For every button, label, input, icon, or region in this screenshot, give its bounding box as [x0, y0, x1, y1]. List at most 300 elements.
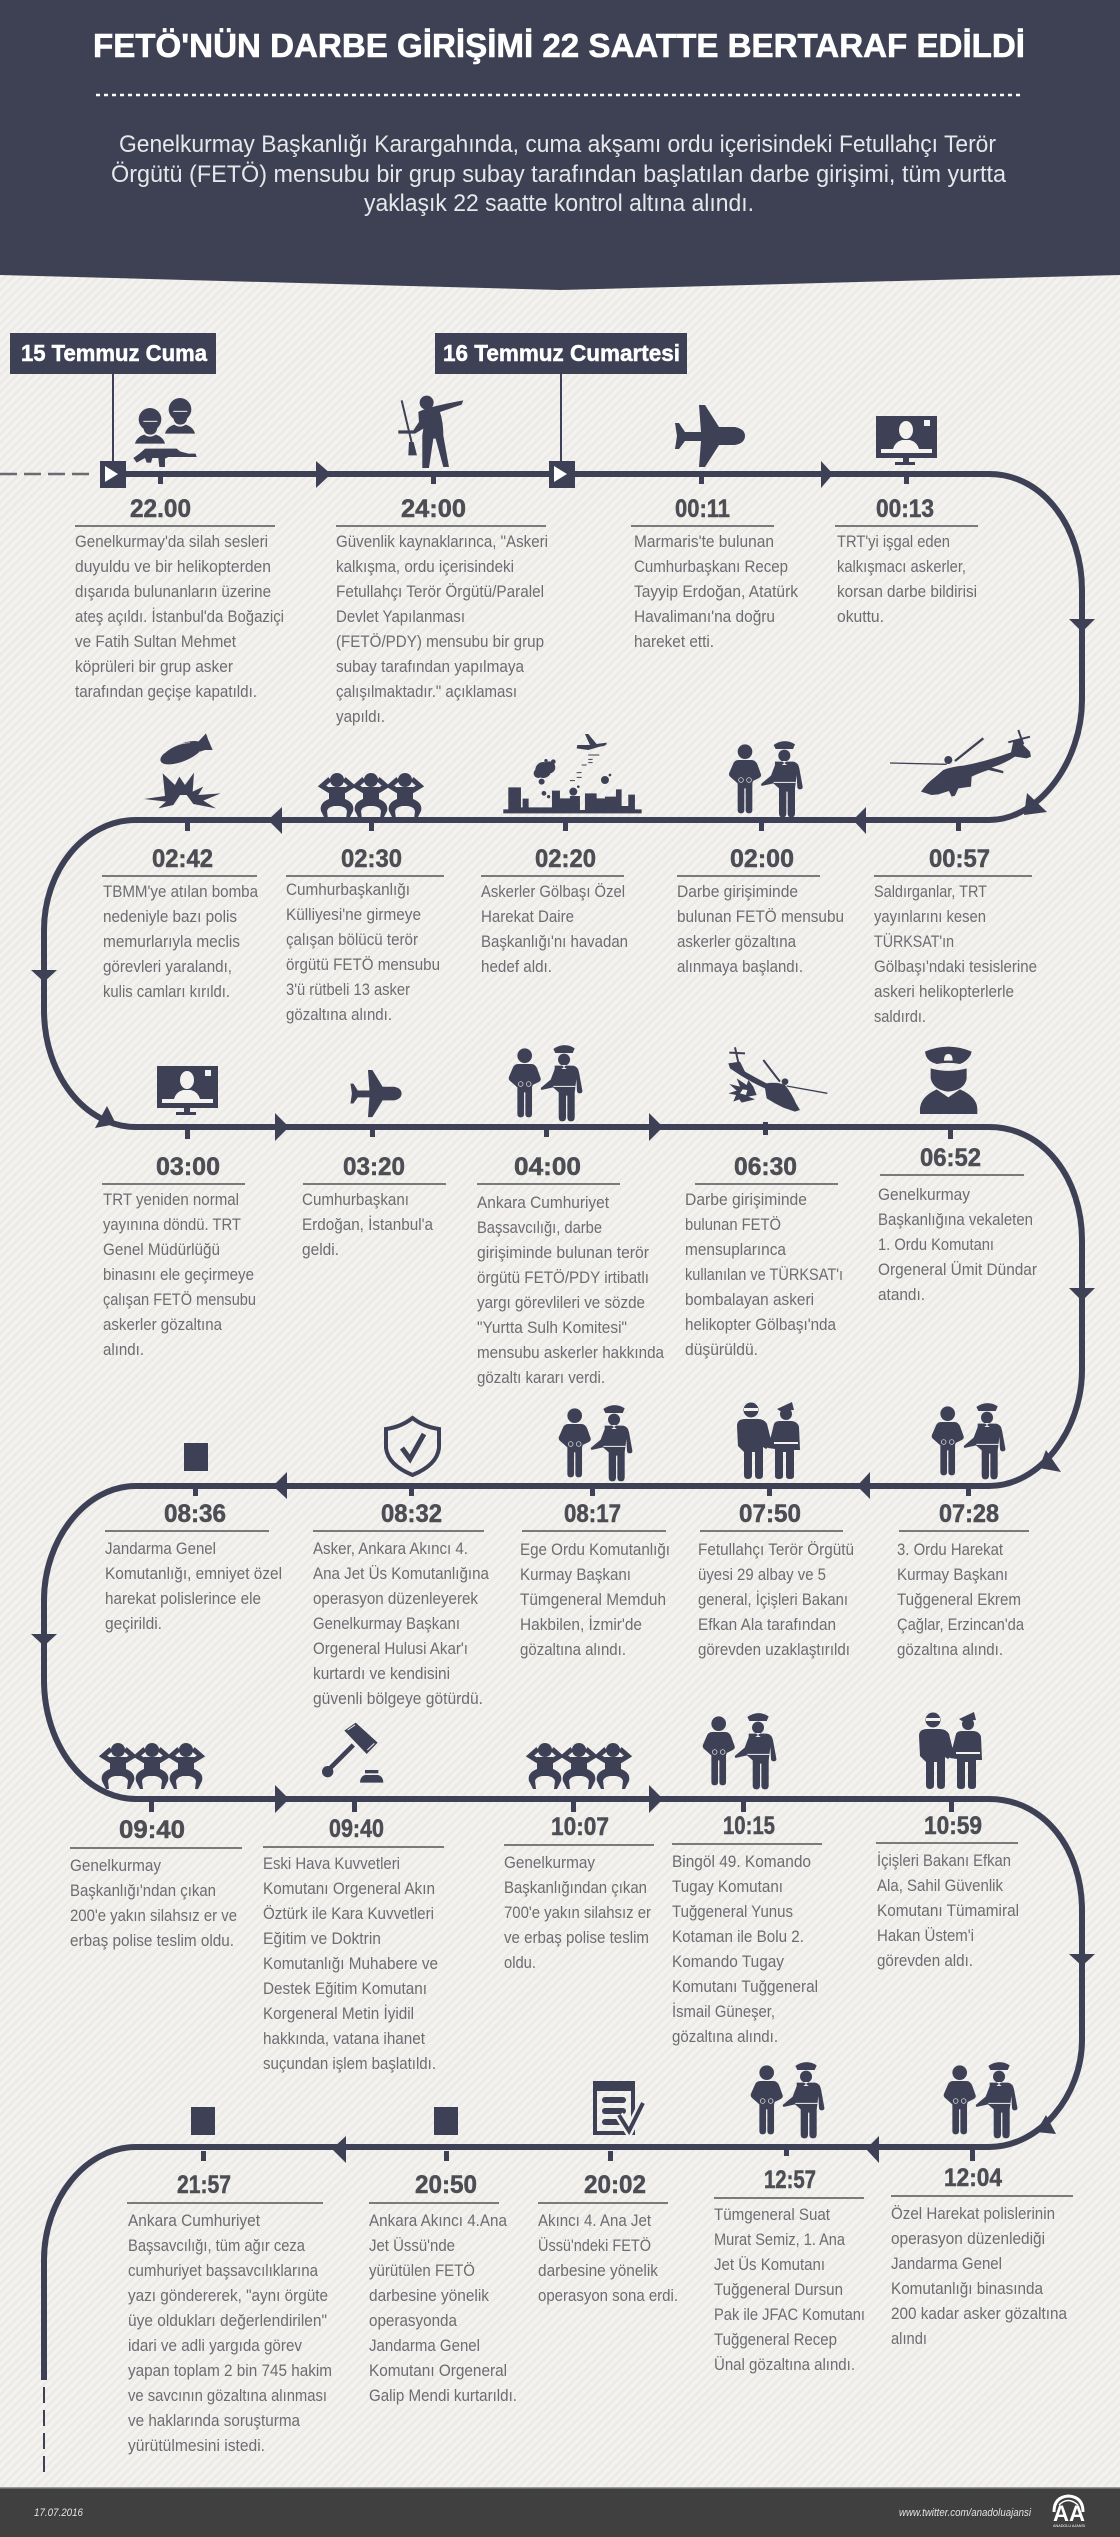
description: Genelkurmay	[70, 1856, 161, 1875]
description: saldırdı.	[874, 1007, 926, 1026]
description	[103, 882, 258, 1001]
description	[477, 1193, 664, 1387]
event: 00:13: 00:13	[876, 495, 934, 523]
description: memurlarıyla meclis	[103, 932, 240, 951]
description: İsmail Güneşer,	[672, 2002, 775, 2021]
description: alındı.	[103, 1340, 144, 1359]
event: 07:50	[698, 1486, 854, 1659]
description: operasyonda	[369, 2311, 457, 2330]
event: 08:36	[105, 1486, 282, 1633]
description: Jet Üssü'nde	[369, 2236, 455, 2255]
description	[714, 2205, 865, 2374]
description: yürütülmesini istedi.	[128, 2436, 265, 2455]
icon: surrendering prisoners	[321, 773, 421, 819]
icon: placeholder square	[184, 1443, 208, 1471]
description: Jandarma Genel	[369, 2336, 480, 2355]
event: 06:52: 06:52	[920, 1144, 981, 1172]
description: yapan toplam 2 bin 745 hakim	[128, 2361, 332, 2380]
description: Murat Semiz, 1. Ana	[714, 2230, 845, 2249]
event: 20:02: 20:02	[584, 2171, 646, 2199]
description	[877, 1851, 1019, 1970]
event: 06:52	[878, 1127, 1037, 1304]
description: Tayyip Erdoğan, Atatürk	[634, 582, 798, 601]
event: 24:00	[336, 474, 548, 726]
icon: arrest	[729, 741, 803, 817]
description: Komutanlığı binasında	[891, 2279, 1043, 2298]
description: Üssü'ndeki FETÖ	[538, 2236, 651, 2255]
logo: Anadolu Ajansı: ANADOLU AJANSI	[1053, 2523, 1085, 2528]
icon: arrest	[751, 2062, 824, 2138]
description: ve haklarında soruşturma	[128, 2411, 300, 2430]
icon: downed helicopter	[728, 1047, 827, 1112]
description: Başsavcılığı, tüm ağır ceza	[128, 2236, 305, 2255]
event: 10:07: 10:07	[551, 1813, 609, 1841]
description: Orgeneral Ümit Dündar	[878, 1260, 1037, 1279]
event: 03:00	[102, 1127, 256, 1359]
description: Başkanlığına vekaleten	[878, 1210, 1033, 1229]
event: 20:02	[538, 2151, 678, 2305]
description	[634, 532, 798, 651]
description: TRT yeniden normal	[103, 1190, 239, 1209]
footer	[0, 2487, 1120, 2537]
description: Ala, Sahil Güvenlik	[877, 1876, 1003, 1895]
description: ve savcının gözaltına alınması	[128, 2386, 327, 2405]
description: Fetullahçı Terör Örgütü	[698, 1540, 854, 1559]
description: Kurmay Başkanı	[897, 1565, 1008, 1584]
description: TRT'yi işgal eden	[837, 532, 950, 551]
description: Tuğgeneral Yunus	[672, 1902, 793, 1921]
description: erbaş polise teslim oldu.	[70, 1931, 234, 1950]
description: Genel Müdürlüğü	[103, 1240, 220, 1259]
event: 04:00	[477, 1127, 664, 1387]
description: 700'e yakın silahsız er	[504, 1903, 651, 1922]
description: üye oldukları değerlendirilen"	[128, 2311, 327, 2330]
description: çalışan FETÖ mensubu	[103, 1290, 256, 1309]
event: 08:32	[313, 1486, 489, 1708]
description: darbesine yönelik	[538, 2261, 658, 2280]
description: İçişleri Bakanı Efkan	[877, 1851, 1011, 1870]
event: 02:42: 02:42	[152, 845, 213, 873]
description: ve erbaş polise teslim	[504, 1928, 649, 1947]
event: 02:00: 02:00	[730, 845, 794, 873]
description: dışarıda bulunanların üzerine	[75, 582, 271, 601]
icon: document with check	[595, 2083, 643, 2133]
event: 21:57	[127, 2151, 332, 2455]
description: ve Fatih Sultan Mehmet	[75, 632, 236, 651]
description: TÜRKSAT'ın	[874, 932, 954, 951]
description: kulis camları kırıldı.	[103, 982, 230, 1001]
event: 09:40: 09:40	[119, 1816, 185, 1844]
description: bulunan FETÖ	[685, 1215, 781, 1234]
event: 10:15	[672, 1799, 822, 2046]
description: Komutanlığı Muhabere ve	[263, 1954, 438, 1973]
description	[520, 1540, 670, 1659]
description: yapıldı.	[336, 707, 385, 726]
icon: arrest	[559, 1405, 632, 1481]
description	[286, 880, 440, 1024]
description: yürütülen FETÖ	[369, 2261, 475, 2280]
header banner	[0, 0, 1120, 290]
timeline path	[0, 461, 1095, 2473]
event: 06:30	[685, 1122, 843, 1359]
description	[698, 1540, 854, 1659]
description	[105, 1539, 282, 1633]
description: ateş açıldı. İstanbul'da Boğaziçi	[75, 607, 284, 626]
description: gözaltına alındı.	[286, 1005, 392, 1024]
event: 12:04: 12:04	[944, 2164, 1002, 2192]
description: Jandarma Genel	[105, 1539, 216, 1558]
icon: bomb and explosion	[144, 733, 221, 808]
description: görevden aldı.	[877, 1951, 973, 1970]
description: mensubu askerler hakkında	[477, 1343, 664, 1362]
description: Çağlar, Erzincan'da	[897, 1615, 1024, 1634]
description: Cumhurbaşkanı	[302, 1190, 409, 1209]
description: Komutanı Tümamiral	[877, 1901, 1019, 1920]
description: bombalayan askeri	[685, 1290, 814, 1309]
description: Cumhurbaşkanlığı	[286, 880, 410, 899]
description: Genelkurmay'da silah sesleri	[75, 532, 268, 551]
event: 02:00	[677, 820, 844, 976]
description: Akıncı 4. Ana Jet	[538, 2211, 651, 2230]
intro text: yaklaşık 22 saatte kontrol altına alındı.	[364, 190, 754, 217]
description	[75, 532, 284, 701]
description	[369, 2211, 517, 2405]
event: 12:04	[891, 2150, 1073, 2348]
description: nedeniyle bazı polis	[103, 907, 237, 926]
description: duyuldu ve bir helikopterden	[75, 557, 271, 576]
description: kurtardı ve kendisini	[313, 1664, 450, 1683]
description: Genelkurmay	[878, 1185, 970, 1204]
description: suçundan işlem başlatıldı.	[263, 2054, 436, 2073]
description: atandı.	[878, 1285, 925, 1304]
description: düşürüldü.	[685, 1340, 758, 1359]
description: geldi.	[302, 1240, 339, 1259]
description: görevden uzaklaştırıldı	[698, 1640, 850, 1659]
event: 00:13	[835, 474, 978, 626]
description: örgütü FETÖ mensubu	[286, 955, 440, 974]
event: 20:50	[369, 2151, 517, 2405]
date: 17.07.2016	[34, 2507, 84, 2519]
description: Havalimanı'na doğru	[634, 607, 775, 626]
description: kullanılan ve TÜRKSAT'ı	[685, 1265, 843, 1284]
icon: officer portrait	[920, 1047, 977, 1114]
description	[103, 1190, 256, 1359]
description	[677, 882, 844, 976]
description: Gölbaşı'ndaki tesislerine	[874, 957, 1037, 976]
title: FETÖ'NÜN DARBE GİRİŞİMİ 22 SAATTE BERTARAF EDİLDİ	[93, 27, 1025, 64]
event: 03:20	[302, 1127, 446, 1259]
date label: 16 Temmuz Cumartesi	[435, 333, 687, 488]
icon: surrendering prisoners	[102, 1743, 202, 1789]
description	[481, 882, 628, 976]
event: 02:20: 02:20	[535, 845, 596, 873]
description: Güvenlik kaynaklarınca, "Askeri	[336, 532, 548, 551]
description: Fetullahçı Terör Örgütü/Paralel	[336, 582, 544, 601]
description: gözaltına alındı.	[672, 2027, 778, 2046]
intro text: Örgütü (FETÖ) mensubu bir grup subay tarafından başlatılan darbe girişimi, tüm yurtta	[111, 161, 1007, 188]
icon: placeholder square	[434, 2107, 458, 2135]
description: Genelkurmay	[504, 1853, 595, 1872]
date label: 15 Temmuz Cuma: 15 Temmuz Cuma	[21, 340, 207, 366]
logo: Anadolu Ajansı: AA	[1053, 2501, 1085, 2526]
description: TBMM'ye atılan bomba	[103, 882, 258, 901]
description: okuttu.	[837, 607, 884, 626]
description: Pak ile JFAC Komutanı	[714, 2305, 865, 2324]
description: Bingöl 49. Komando	[672, 1852, 811, 1871]
description: Tuğgeneral Dursun	[714, 2280, 843, 2299]
description: Tugay Komutanı	[672, 1877, 783, 1896]
icon: plane	[350, 1070, 402, 1117]
description: Cumhurbaşkanı Recep	[634, 557, 788, 576]
event: 24:00: 24:00	[401, 495, 466, 523]
description: görevleri yaralandı,	[103, 957, 232, 976]
description: yayınına döndü. TRT	[103, 1215, 241, 1234]
description: Başsavcılığı, darbe	[477, 1218, 602, 1237]
event: 02:30: 02:30	[341, 845, 402, 873]
event: 22.00: 22.00	[130, 495, 191, 523]
description	[302, 1190, 433, 1259]
icon: masked suspect and officer	[737, 1402, 800, 1479]
description	[672, 1852, 818, 2046]
icon: arrest	[509, 1045, 582, 1121]
description: Ankara Cumhuriyet	[128, 2211, 260, 2230]
event: 09:40 (second)	[263, 1799, 444, 2073]
event: 21:57: 21:57	[177, 2171, 231, 2199]
date label: 15 Temmuz Cuma	[10, 333, 216, 488]
event: 08:32: 08:32	[381, 1500, 442, 1528]
description: Tuğgeneral Recep	[714, 2330, 837, 2349]
icon: soldiers and rifle	[133, 398, 197, 467]
description: Eski Hava Kuvvetleri	[263, 1854, 400, 1873]
description: Ünal gözaltına alındı.	[714, 2355, 855, 2374]
description: Başkanlığı'ndan çıkan	[70, 1881, 216, 1900]
description: Tümgeneral Memduh	[520, 1590, 666, 1609]
description: tarafından geçişe kapatıldı.	[75, 682, 257, 701]
description	[263, 1854, 438, 2073]
description: girişiminde bulunan terör	[477, 1243, 649, 1262]
event: 02:42	[102, 820, 258, 1001]
event: 10:59: 10:59	[924, 1812, 982, 1840]
intro text	[111, 131, 1007, 217]
event: 20:50: 20:50	[415, 2171, 477, 2199]
icon: plane	[675, 405, 745, 467]
description: korsan darbe bildirisi	[837, 582, 977, 601]
intro text: Genelkurmay Başkanlığı Karargahında, cuma akşamı ordu içerisindeki Fetullahçı Terör	[119, 131, 996, 158]
description: hareket etti.	[634, 632, 714, 651]
description: örgütü FETÖ/PDY irtibatlı	[477, 1268, 649, 1287]
icon: masked suspect and officer	[919, 1712, 982, 1789]
icon: armed soldier	[398, 396, 463, 468]
description: Devlet Yapılanması	[336, 607, 465, 626]
description: operasyon düzenlediği	[891, 2229, 1045, 2248]
description: Orgeneral Hulusi Akar'ı	[313, 1639, 468, 1658]
icon: television	[157, 1066, 218, 1115]
description	[685, 1190, 843, 1359]
description: Ana Jet Üs Komutanlığına	[313, 1564, 489, 1583]
description: Erdoğan, İstanbul'a	[302, 1215, 433, 1234]
event: 09:40 (second): 09:40	[329, 1815, 384, 1843]
description: Korgeneral Metin İyidil	[263, 2004, 414, 2023]
description: mensuplarınca	[685, 1240, 786, 1259]
description: geçirildi.	[105, 1614, 162, 1633]
event: 08:17	[520, 1486, 670, 1659]
description: oldu.	[504, 1953, 536, 1972]
description	[897, 1540, 1024, 1659]
description: Galip Mendi kurtarıldı.	[369, 2386, 517, 2405]
date label: 16 Temmuz Cumartesi: 16 Temmuz Cumartesi	[443, 340, 680, 366]
description: bulunan FETÖ mensubu	[677, 907, 844, 926]
description: Ankara Akıncı 4.Ana	[369, 2211, 507, 2230]
event: 12:57	[714, 2149, 865, 2374]
icon: attack helicopter	[890, 730, 1031, 797]
description: Marmaris'te bulunan	[634, 532, 774, 551]
description: Hakbilen, İzmir'de	[520, 1615, 642, 1634]
description: "Yurtta Sulh Komitesi"	[477, 1318, 627, 1337]
description: operasyon sona erdi.	[538, 2286, 678, 2305]
description: (FETÖ/PDY) mensubu bir grup	[336, 632, 544, 651]
icon: television	[876, 416, 937, 465]
description: Komutanı Tuğgeneral	[672, 1977, 818, 1996]
description: operasyon düzenleyerek	[313, 1589, 478, 1608]
description	[336, 532, 548, 726]
event: 00:57: 00:57	[929, 845, 990, 873]
description: Darbe girişiminde	[685, 1190, 807, 1209]
description: Destek Eğitim Komutanı	[263, 1979, 427, 1998]
event: 07:28: 07:28	[939, 1500, 999, 1528]
description: Külliyesi'ne girmeye	[286, 905, 421, 924]
description: Hakan Üstem'i	[877, 1926, 974, 1945]
description: Tuğgeneral Ekrem	[897, 1590, 1021, 1609]
event: 06:30: 06:30	[734, 1153, 797, 1181]
description	[70, 1856, 237, 1950]
description: yayınlarını kesen	[874, 907, 986, 926]
description: Harekat Daire	[481, 907, 574, 926]
description: 1. Ordu Komutanı	[878, 1235, 994, 1254]
description: general, İçişleri Bakanı	[698, 1590, 848, 1609]
description: çalışılmaktadır." açıklaması	[336, 682, 517, 701]
description: Genelkurmay Başkanı	[313, 1614, 460, 1633]
description	[837, 532, 977, 626]
description: Asker, Ankara Akıncı 4.	[313, 1539, 468, 1558]
description: helikopter Gölbaşı'nda	[685, 1315, 836, 1334]
description: 3. Ordu Harekat	[897, 1540, 1003, 1559]
description: 3'ü rütbeli 13 asker	[286, 980, 410, 999]
event: 10:15: 10:15	[723, 1812, 775, 1840]
description: Jandarma Genel	[891, 2254, 1002, 2273]
description: üyesi 29 albay ve 5	[698, 1565, 826, 1584]
description: Komutanı Orgeneral	[369, 2361, 507, 2380]
icon: arrest	[944, 2062, 1017, 2138]
description: subay tarafından yapılmaya	[336, 657, 524, 676]
description: cumhuriyet başsavcılıklarına	[128, 2261, 318, 2280]
description: kalkışma, ordu içerisindeki	[336, 557, 514, 576]
description: alındı	[891, 2329, 927, 2348]
description: Özel Harekat polislerinin	[891, 2204, 1055, 2223]
description: Darbe girişiminde	[677, 882, 798, 901]
event: 02:20	[481, 820, 628, 976]
description: idari ve adli yargıda görev	[128, 2336, 302, 2355]
description: Ankara Cumhuriyet	[477, 1193, 609, 1212]
description: askerler gözaltına	[103, 1315, 222, 1334]
event: 12:57: 12:57	[764, 2166, 816, 2194]
icon: gavel	[322, 1723, 383, 1783]
description	[504, 1853, 651, 1972]
description: gözaltı kararı verdi.	[477, 1368, 605, 1387]
description: gözaltına alındı.	[897, 1640, 1003, 1659]
description: Başkanlığından çıkan	[504, 1878, 647, 1897]
icon: placeholder square	[191, 2107, 215, 2135]
description: Komutanlığı, emniyet özel	[105, 1564, 282, 1583]
event: 08:36: 08:36	[164, 1500, 226, 1528]
description: çalışan bölücü terör	[286, 930, 418, 949]
description	[128, 2211, 332, 2455]
description	[538, 2211, 678, 2305]
icon: shield with check	[386, 1418, 439, 1475]
description: hakkında, vatana ihanet	[263, 2029, 425, 2048]
description: güvenli bölgeye götürdü.	[313, 1689, 483, 1708]
event: 00:11: 00:11	[675, 495, 730, 523]
description: kalkışmacı askerler,	[837, 557, 966, 576]
event: 04:00: 04:00	[514, 1153, 581, 1181]
description: harekat polislerince ele	[105, 1589, 261, 1608]
icon: arrest	[703, 1713, 776, 1789]
description: Saldırganlar, TRT	[874, 882, 987, 901]
description: Öztürk ile Kara Kuvvetleri	[263, 1904, 434, 1923]
description	[891, 2204, 1067, 2348]
event: 07:50: 07:50	[739, 1500, 801, 1528]
source link: www.twitter.com/anadoluajansi	[899, 2507, 1031, 2519]
description: Eğitim ve Doktrin	[263, 1929, 381, 1948]
icon: arrest	[932, 1403, 1005, 1479]
event: 10:07	[504, 1799, 654, 1972]
description: Askerler Gölbaşı Özel	[481, 882, 625, 901]
event: 03:00: 03:00	[156, 1153, 220, 1181]
event: 00:11	[631, 474, 798, 651]
event: 09:40	[70, 1799, 242, 1950]
event: 07:28	[897, 1486, 1029, 1659]
event: 22.00	[75, 474, 284, 701]
description: yargı görevlileri ve sözde	[477, 1293, 645, 1312]
description: Jet Üs Komutanı	[714, 2255, 825, 2274]
description: Kurmay Başkanı	[520, 1565, 631, 1584]
description	[313, 1539, 489, 1708]
description: askerler gözaltına	[677, 932, 796, 951]
description: Ege Ordu Komutanlığı	[520, 1540, 670, 1559]
description: alınmaya başlandı.	[677, 957, 803, 976]
description	[878, 1185, 1037, 1304]
description: Başkanlığı'nı havadan	[481, 932, 628, 951]
description: hedef aldı.	[481, 957, 552, 976]
description: gözaltına alındı.	[520, 1640, 626, 1659]
description: binasını ele geçirmeye	[103, 1265, 254, 1284]
event: 10:59	[876, 1799, 1019, 1970]
arrowheads	[31, 461, 1095, 2163]
description: köprüleri bir grup asker	[75, 657, 233, 676]
event: 08:17: 08:17	[564, 1500, 621, 1528]
description: 200'e yakın silahsız er ve	[70, 1906, 237, 1925]
description: yazı göndererek, "aynı örgüte	[128, 2286, 328, 2305]
description: Komutanı Orgeneral Akın	[263, 1879, 435, 1898]
description: 200 kadar asker gözaltına	[891, 2304, 1067, 2323]
icon: bombed city	[503, 734, 642, 813]
event: 00:57	[874, 820, 1037, 1026]
description: Tümgeneral Suat	[714, 2205, 830, 2224]
event: 03:20: 03:20	[343, 1153, 405, 1181]
description	[874, 882, 1037, 1026]
description: Komando Tugay	[672, 1952, 784, 1971]
description: Kotaman ile Bolu 2.	[672, 1927, 804, 1946]
icon: surrendering prisoners	[529, 1743, 629, 1789]
